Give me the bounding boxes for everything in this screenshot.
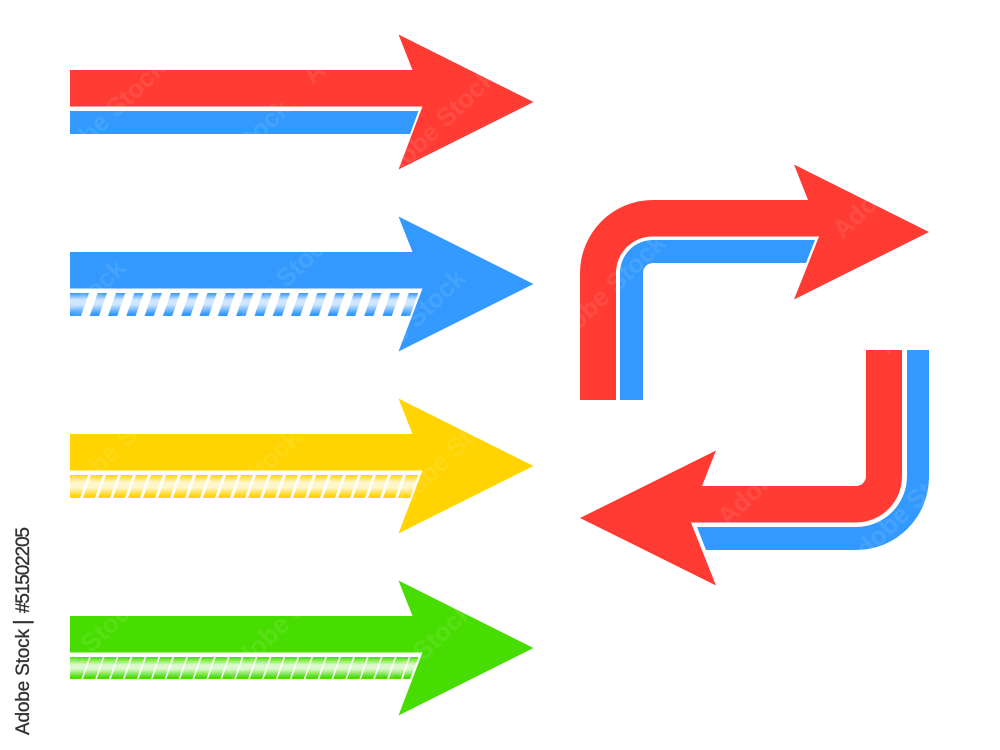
- watermark pattern: Adobe Stock: [836, 444, 972, 577]
- watermark pattern: Adobe Stock: [376, 392, 512, 525]
- arrow: yellow with hatched strip: [70, 398, 534, 534]
- watermark pattern: Adobe Stock: [496, 102, 632, 235]
- watermark pattern: Adobe Stock: [336, 262, 472, 395]
- arrow: curved down and left: [580, 350, 929, 586]
- watermark pattern: Adobe Stock: [536, 227, 672, 360]
- watermark pattern: Adobe Stock: [504, 434, 640, 567]
- watermark pattern: Adobe Stock: [366, 62, 502, 195]
- arrow: blue with hatched strip: [70, 216, 534, 352]
- stock id caption: |: [9, 619, 34, 625]
- watermark pattern: Adobe Stock: [701, 62, 837, 195]
- watermark pattern: Adobe Stock: [711, 399, 847, 532]
- watermark pattern: Adobe Stock: [343, 595, 479, 728]
- watermark pattern: Adobe Stock: [216, 554, 352, 687]
- watermark pattern: Adobe Stock: [46, 382, 182, 515]
- watermark pattern: Adobe Stock: [161, 92, 297, 225]
- watermark pattern: Adobe Stock: [0, 252, 132, 385]
- arrow: green with hatched strip: [70, 580, 534, 716]
- stock id caption: #51502205: [13, 527, 34, 613]
- watermark pattern: Adobe Stock: [661, 272, 797, 405]
- watermark pattern: Adobe Stock: [11, 587, 147, 720]
- watermark pattern: Adobe Stock: [206, 222, 342, 355]
- watermark pattern: Adobe Stock: [546, 564, 682, 697]
- watermark pattern: Adobe Stock: [36, 52, 172, 185]
- watermark pattern: Adobe Stock: [826, 112, 962, 245]
- arrow: red with blue underline: [70, 34, 534, 170]
- arrow: curved up and right: [580, 164, 929, 400]
- watermark pattern: Adobe Stock: [674, 605, 810, 738]
- stock id caption: Adobe Stock: [13, 628, 34, 735]
- watermark pattern: Adobe Stock: [171, 422, 307, 555]
